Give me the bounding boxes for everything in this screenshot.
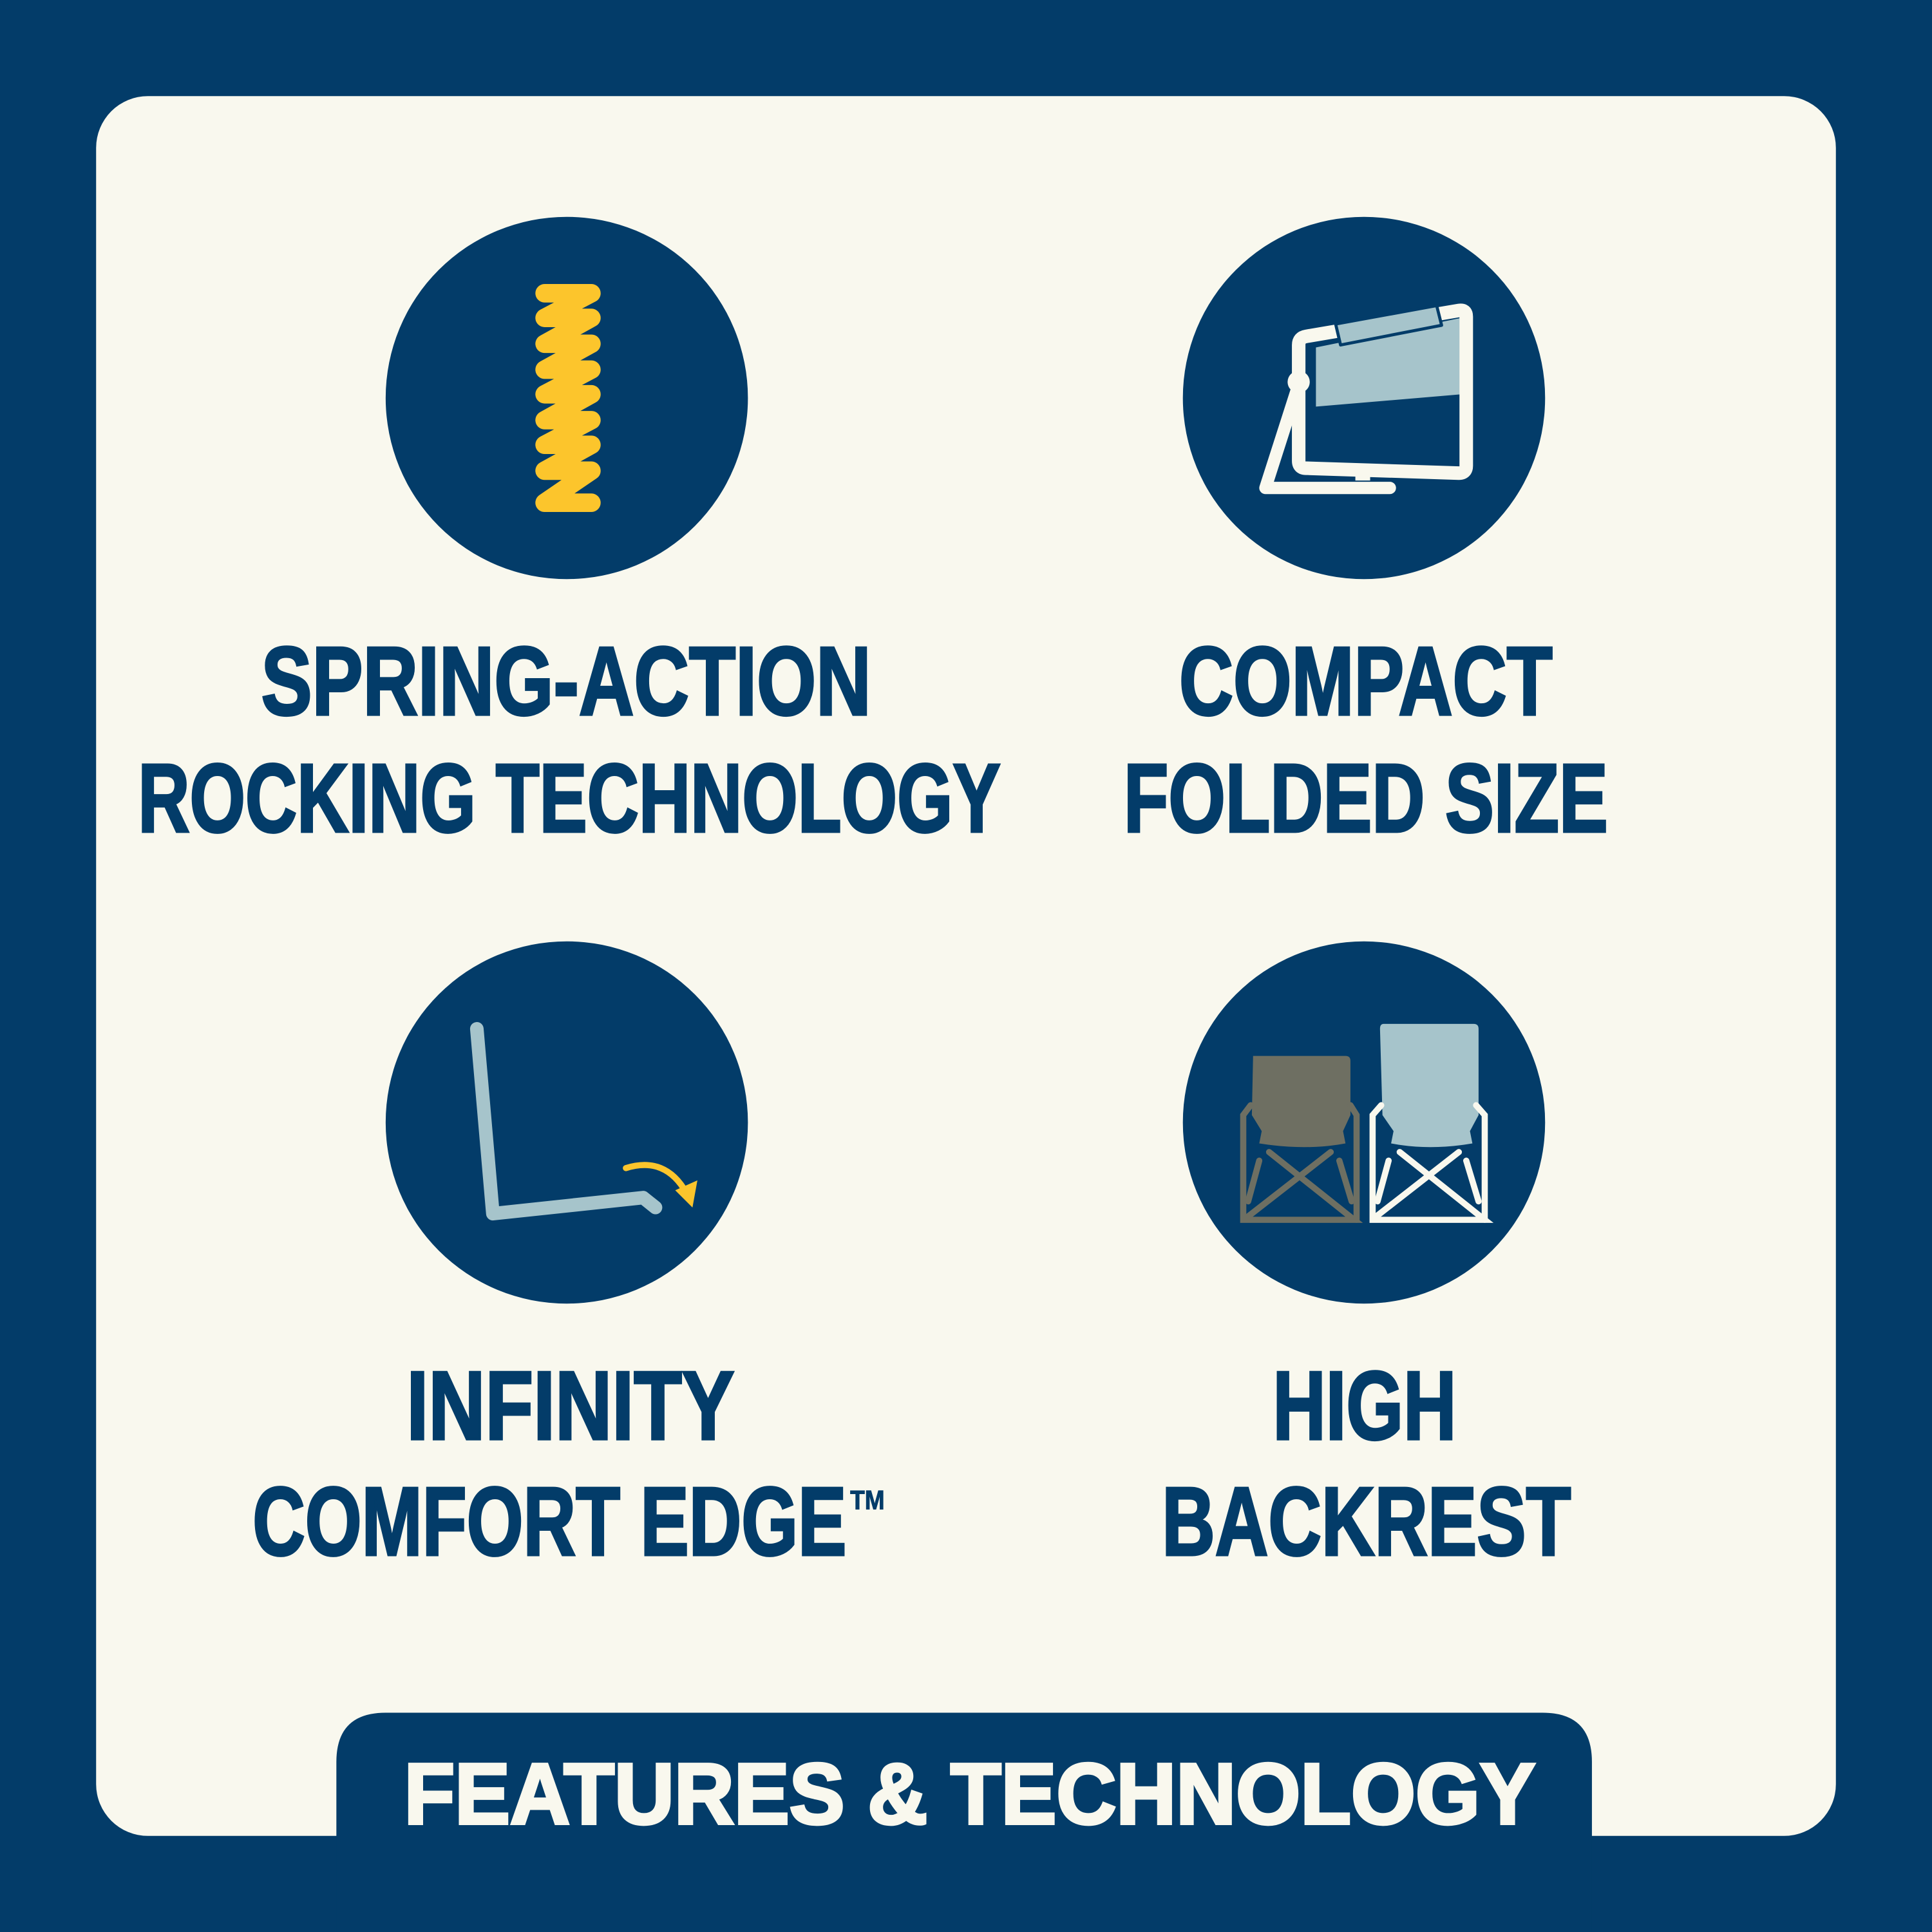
text: infinity comfort edge: COMFORT EDGE — [252, 1468, 846, 1577]
text: spring-action rocking technology: ROCKING TECHNOLOGY — [138, 744, 1001, 853]
icon circle: spring — [386, 217, 748, 579]
icon circle: infinity comfort edge — [386, 942, 748, 1303]
text: spring-action rocking technology: SPRING-ACTION — [261, 627, 871, 736]
text: high backrest: HIGH — [1273, 1352, 1456, 1461]
text: high backrest — [1162, 1352, 1571, 1577]
footer tab — [336, 1712, 1592, 1932]
icon: spring — [545, 293, 591, 503]
icon: gray chair — [1243, 1056, 1357, 1220]
text: infinity comfort edge — [252, 1352, 885, 1577]
icon: L seat profile — [477, 1029, 656, 1214]
icon: folded chair — [1265, 305, 1466, 488]
text: spring-action rocking technology — [138, 627, 1001, 853]
icon: blue chair — [1372, 1024, 1484, 1220]
text: high backrest: BACKREST — [1162, 1468, 1571, 1577]
text: compact folded size — [1124, 627, 1608, 853]
text: compact folded size: COMPACT — [1179, 627, 1553, 736]
text: infinity comfort edge: INFINITY — [406, 1352, 734, 1461]
icon circle: high backrest — [1183, 942, 1545, 1303]
text: compact folded size: FOLDED SIZE — [1124, 744, 1608, 853]
icon circle: compact folded — [1183, 217, 1545, 579]
icon: yellow arrow — [626, 1165, 697, 1208]
text: infinity comfort edge: TM — [850, 1485, 885, 1515]
footer title: FEATURES & TECHNOLOGY — [404, 1747, 1535, 1842]
